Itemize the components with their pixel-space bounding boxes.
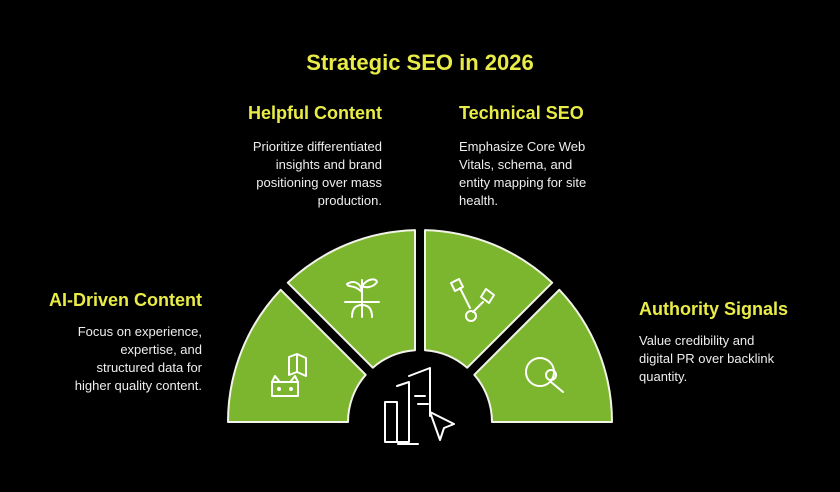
segment: helpful content (288, 230, 415, 368)
segment: authority signals (474, 290, 612, 422)
heading: technical seo: Technical SEO (459, 103, 584, 123)
text: helpful content: production. (318, 193, 382, 208)
heading: helpful content: Helpful Content (248, 103, 382, 123)
text: ai-driven content: Focus on experience, (78, 324, 202, 339)
text: helpful content: positioning over mass (256, 175, 382, 190)
text: authority signals: Value credibility and (639, 333, 754, 348)
heading: ai-driven content: AI-Driven Content (49, 290, 202, 310)
text: authority signals (639, 333, 774, 384)
text: ai-driven content: higher quality content. (75, 378, 202, 393)
icon: pistons and gear (451, 279, 494, 321)
text: ai-driven content (75, 324, 202, 393)
icon: globe with gear (526, 358, 563, 392)
text: helpful content: insights and brand (276, 157, 382, 172)
text: authority signals: quantity. (639, 369, 687, 384)
text: helpful content: Prioritize differentiated (253, 139, 382, 154)
text: ai-driven content: structured data for (96, 360, 202, 375)
text: technical seo: Vitals, schema, and (459, 157, 572, 172)
icon: sprout with roots (345, 279, 379, 317)
text: technical seo: entity mapping for site (459, 175, 586, 190)
text: helpful content (253, 139, 382, 208)
text: technical seo (459, 139, 586, 208)
text: technical seo: health. (459, 193, 498, 208)
text: technical seo: Emphasize Core Web (459, 139, 585, 154)
text: authority signals: digital PR over backlink (639, 351, 774, 366)
icon: robot with book (272, 354, 306, 396)
icon: center buildings and cursor (385, 368, 454, 444)
segment: technical seo (425, 230, 552, 368)
title: Strategic SEO in 2026 (306, 50, 534, 75)
text: ai-driven content: expertise, and (120, 342, 202, 357)
heading: authority signals: Authority Signals (639, 299, 788, 319)
segment: ai-driven content (228, 290, 366, 422)
